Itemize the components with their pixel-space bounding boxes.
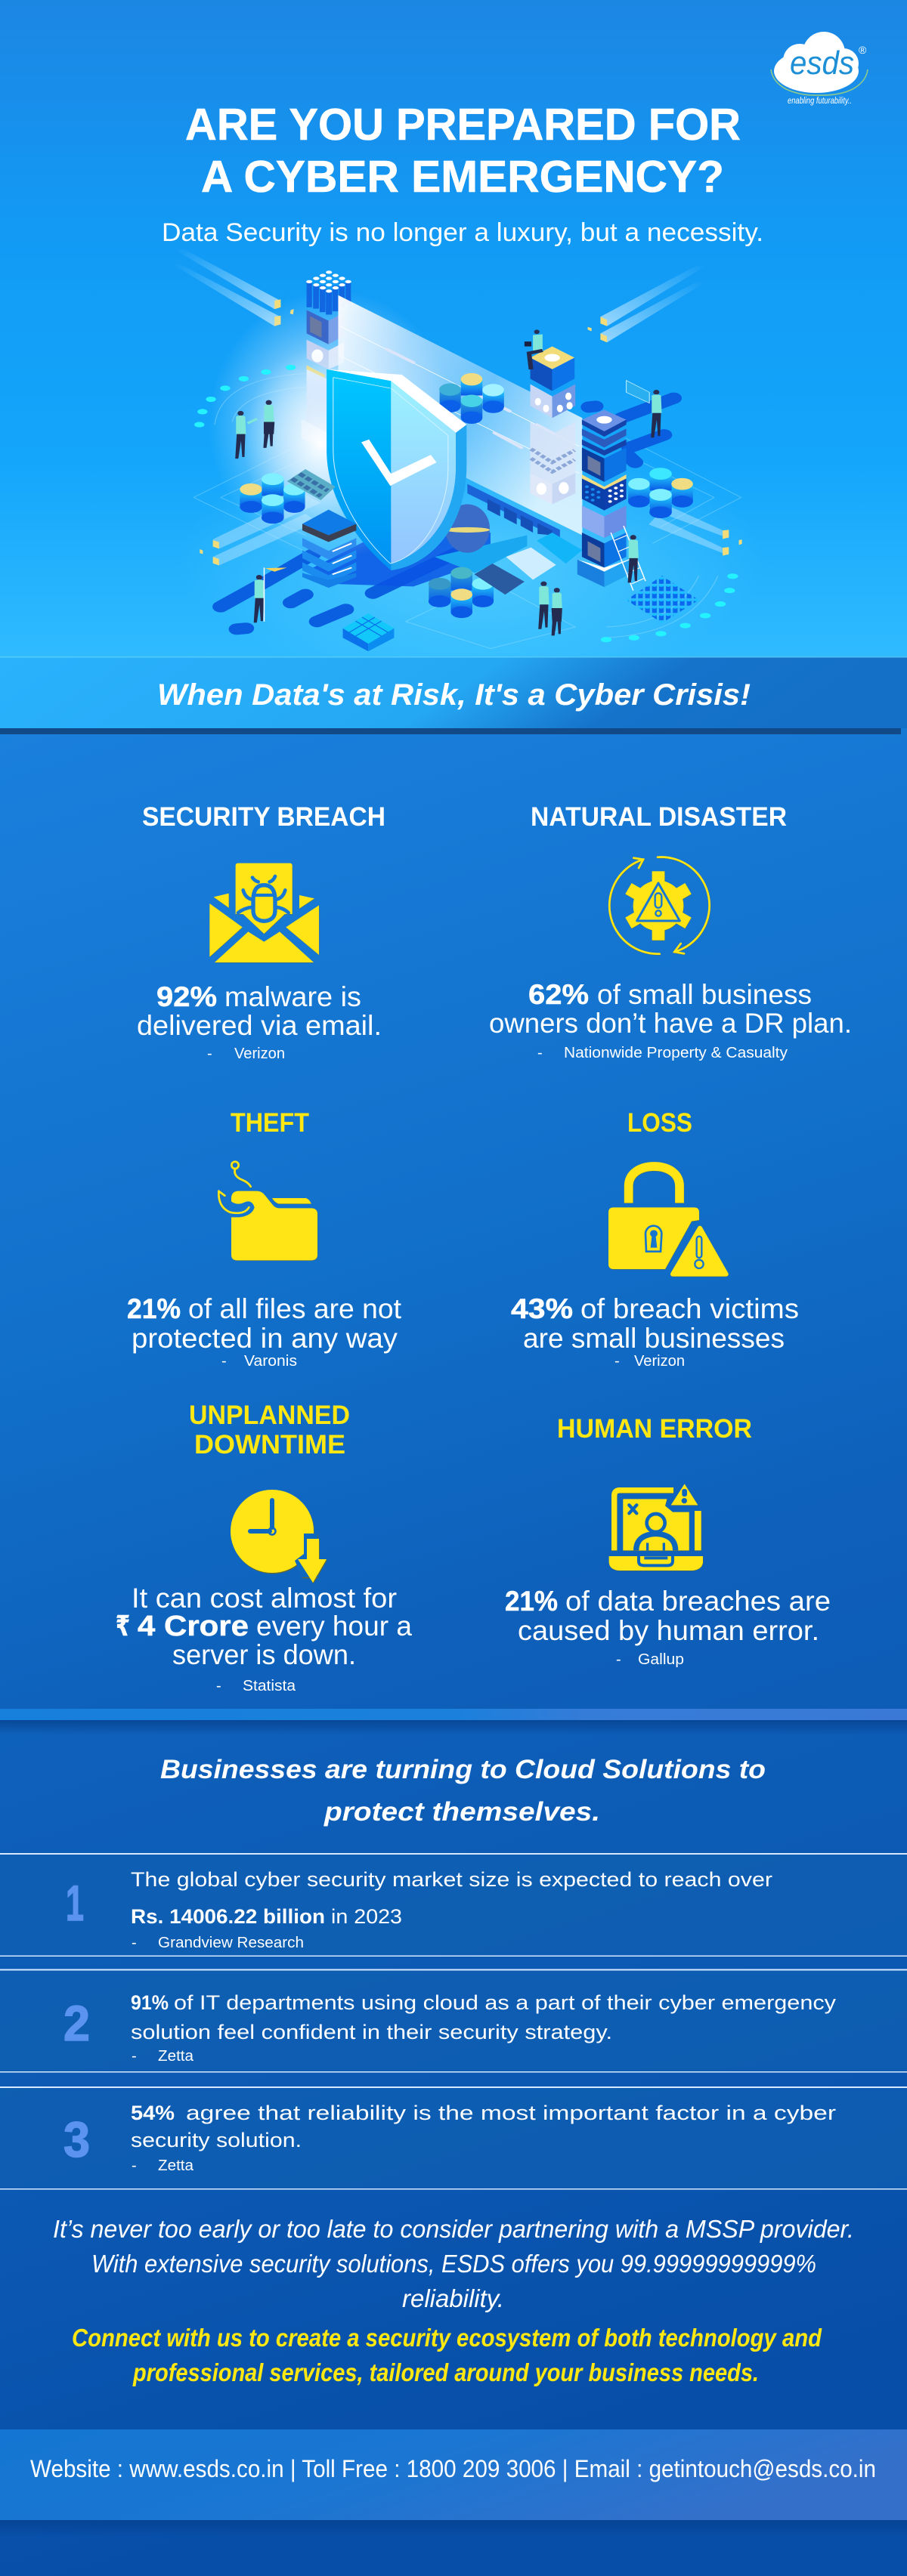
panel: theft: - (221, 1353, 227, 1370)
closing statement (53, 2215, 854, 2312)
banner: When Data's at Risk, It's a Cyber Crisis! (157, 678, 751, 712)
heading: cloud solutions: protect themselves. (323, 1797, 600, 1827)
hero illustration: isometric cyber security shield scene (172, 249, 764, 684)
small cube grid (343, 613, 394, 651)
closing statement: It’s never too early or too late to consider partnering with a MSSP provider. (53, 2215, 854, 2243)
shield (327, 369, 466, 570)
closing statement: reliability. (402, 2284, 504, 2312)
panel: human error: 21% (505, 1586, 558, 1617)
banner (0, 656, 907, 734)
panel: security breach: delivered via email. (137, 1010, 382, 1041)
glass panel (338, 295, 582, 536)
panel: unplanned downtime: UNPLANNED (189, 1401, 350, 1430)
panel: unplanned downtime: It can cost almost for (132, 1583, 397, 1614)
panel circuit line (340, 326, 579, 473)
list item 1: The global cyber security market size is expected to reach over (131, 1868, 772, 1891)
list item 1: 1 (66, 1875, 84, 1931)
panel: human error: - (616, 1651, 621, 1668)
list item 3: agree that reliability is the most important factor in a cyber (186, 2102, 836, 2124)
panel: unplanned downtime (116, 1401, 412, 1694)
cylinders: left group (240, 469, 336, 524)
panel: unplanned downtime: ₹ (116, 1611, 130, 1642)
people (235, 381, 662, 635)
panel: theft: THEFT (231, 1108, 309, 1138)
glow behind panel (209, 290, 456, 560)
soft light around shield (243, 347, 398, 541)
subtitle: Data Security is no longer a luxury, but a necessity. (162, 218, 763, 247)
panel: security breach: SECURITY BREACH (142, 802, 385, 832)
list item 3: 3 (63, 2111, 90, 2167)
panel: loss: - (614, 1353, 620, 1370)
closing statement: With extensive security solutions, ESDS offers you 99.99999999999% (91, 2250, 816, 2278)
panel: unplanned downtime: server is down. (172, 1639, 356, 1670)
dotted arcs (194, 365, 738, 642)
panel: unplanned downtime: - (216, 1678, 221, 1694)
panel: loss: are small businesses (523, 1323, 785, 1354)
panel: human error: caused by human error. (518, 1615, 819, 1646)
icon: laptop with person and warning (609, 1484, 703, 1571)
cylinders: behind glass (439, 373, 504, 424)
panel: natural disaster: 62% (528, 979, 589, 1010)
panel: unplanned downtime: every hour a (256, 1611, 412, 1642)
list item 3: - (132, 2157, 137, 2174)
panel: natural disaster (489, 802, 852, 1061)
panel: unplanned downtime: Statista (243, 1678, 296, 1694)
list item 2: Zetta (158, 2048, 194, 2065)
panel: loss: of breach victims (580, 1293, 799, 1324)
panel: human error: HUMAN ERROR (557, 1414, 752, 1444)
panel: theft: protected in any way (132, 1323, 398, 1354)
cylinders: bottom group (429, 533, 582, 618)
logo: esds cloud (771, 32, 868, 106)
icon: folder on phishing hook (218, 1162, 317, 1260)
list item 3: 54% (131, 2102, 175, 2124)
panel: natural disaster: owners don’t have a DR plan. (489, 1008, 852, 1039)
logo: esds cloud: enabling futurability.. (788, 95, 852, 106)
panel: loss: 43% (511, 1293, 573, 1324)
background: body gradient (0, 728, 907, 2576)
pin grid (627, 576, 698, 623)
right tower (577, 409, 630, 587)
panel: human error: of data breaches are (565, 1586, 831, 1617)
panel: loss (511, 1108, 799, 1370)
panel: natural disaster: of small business (597, 979, 812, 1010)
light bars: top right (588, 265, 707, 342)
logo: esds cloud: ® (859, 44, 867, 56)
panel: natural disaster: NATURAL DISASTER (531, 802, 787, 832)
logo: esds cloud: esds (790, 45, 854, 82)
heading: cloud solutions: Businesses are turning to Cloud Solutions to (160, 1755, 766, 1784)
panel: unplanned downtime: 4 Crore (138, 1611, 249, 1642)
list item 1: Grandview Research (158, 1935, 304, 1951)
list item 1: - (132, 1935, 137, 1951)
list item 2: - (132, 2048, 137, 2065)
panel: loss: Verizon (634, 1353, 685, 1370)
platform and rack blocks (435, 484, 560, 573)
cylinders: right group (628, 468, 693, 518)
list item 3 (0, 2086, 907, 2189)
background: top hero gradient (0, 0, 907, 657)
footer contact bar (0, 2429, 907, 2537)
call to action (72, 2324, 822, 2386)
panel: natural disaster: - (537, 1045, 543, 1061)
list item 2 (0, 1969, 907, 2073)
call to action: professional services, tailored around your business needs. (132, 2358, 759, 2386)
list item 2: solution feel confident in their security strategy. (131, 2021, 612, 2043)
panel: theft (127, 1108, 402, 1370)
panel: unplanned downtime: DOWNTIME (194, 1430, 345, 1459)
list item 1: in 2023 (331, 1905, 402, 1928)
top cube with sitting person (525, 329, 574, 391)
panel: theft: of all files are not (188, 1293, 402, 1324)
panel: loss: LOSS (627, 1108, 692, 1138)
divider strip (0, 1709, 907, 1735)
list item 2: 2 (63, 1995, 90, 2051)
icon: clock with down arrow (231, 1490, 327, 1583)
list item 3: security solution. (131, 2129, 302, 2151)
server stack (302, 510, 356, 588)
title (185, 100, 741, 202)
icon: padlock with warning (608, 1166, 726, 1274)
panel: security breach: 92% (156, 981, 217, 1012)
panel: natural disaster: Nationwide Property & Casualty (564, 1045, 788, 1061)
panel: security breach (137, 802, 385, 1062)
dark blue circuit blobs (221, 398, 673, 629)
icon: gear with warning and arrows (609, 857, 710, 954)
ladder (611, 526, 645, 591)
call to action: Connect with us to create a security ecosystem of both technology and (72, 2324, 822, 2352)
light bars: top left (172, 249, 294, 326)
list item 1: Rs. 14006.22 billion (131, 1905, 325, 1928)
heading: cloud solutions (160, 1755, 766, 1827)
panel: security breach: malware is (224, 981, 361, 1012)
panel: theft: Varonis (244, 1353, 297, 1370)
panel: security breach: Verizon (234, 1046, 285, 1062)
list item 2: of IT departments using cloud as a part of their cyber emergency (174, 1991, 837, 2014)
panel: human error (505, 1414, 831, 1668)
panel: theft: 21% (127, 1293, 181, 1324)
icon: envelope with bug (209, 863, 319, 962)
list item 3: Zetta (158, 2157, 194, 2174)
title: A CYBER EMERGENCY? (201, 152, 724, 202)
light bars: lower (200, 495, 742, 566)
list item 1 (0, 1853, 907, 1957)
mid tower behind glass (531, 385, 575, 504)
left tower (302, 270, 351, 454)
panel: security breach: - (207, 1046, 212, 1062)
title: ARE YOU PREPARED FOR (185, 100, 741, 150)
panel: human error: Gallup (638, 1651, 684, 1668)
list item 2: 91% (131, 1991, 169, 2014)
